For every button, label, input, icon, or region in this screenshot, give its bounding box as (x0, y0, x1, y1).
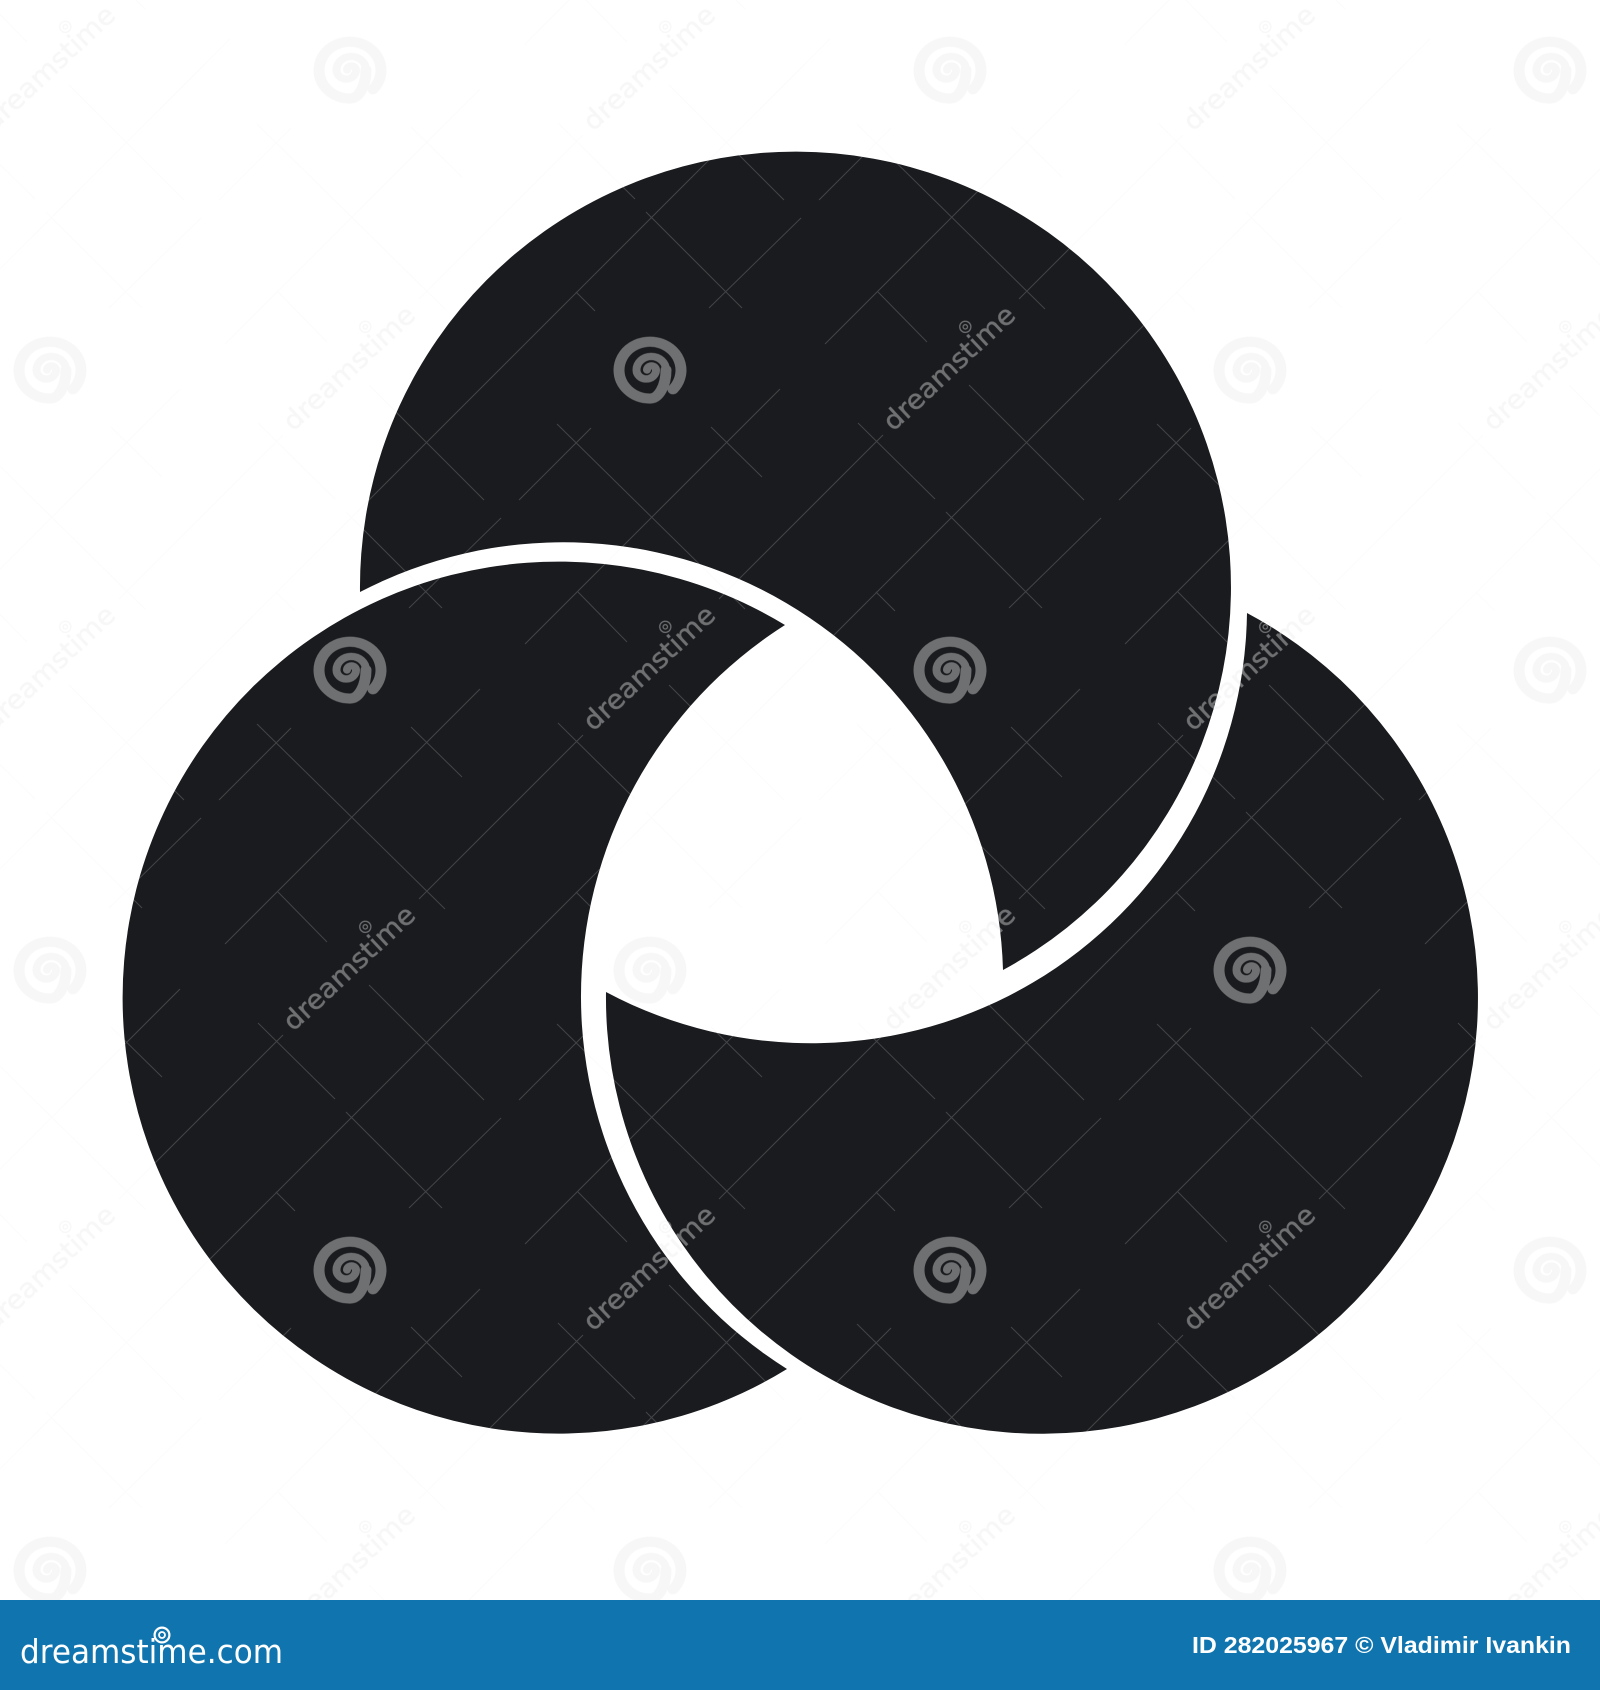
watermark text: dreamstime (577, 1199, 722, 1337)
watermark text: dreamstime (277, 299, 422, 437)
watermark text: dreamstime (877, 899, 1022, 1037)
right circle segment (606, 613, 1478, 1434)
watermark text: dreamstime (277, 899, 422, 1037)
watermark text: dreamstime (577, 0, 722, 137)
watermark text: dreamstime (577, 599, 722, 737)
footer logo spiral icon (155, 1628, 169, 1642)
footer logo text: dreamstime.com (20, 1632, 283, 1671)
watermark text: dreamstime (1177, 599, 1322, 737)
watermark text: dreamstime (1177, 1199, 1322, 1337)
left circle segment (123, 562, 787, 1434)
footer background (0, 1600, 1600, 1690)
watermark text: dreamstime (877, 299, 1022, 437)
image id and credit: ID 282025967 © Vladimir Ivankin (1192, 1632, 1571, 1658)
top circle segment (360, 152, 1231, 970)
footer bar (0, 1600, 1600, 1690)
watermark text: dreamstime (877, 1499, 1022, 1637)
logo mark: three interlocking circles (123, 152, 1478, 1434)
watermark text: dreamstime (1177, 0, 1322, 137)
watermark text: dreamstime (277, 1499, 422, 1637)
